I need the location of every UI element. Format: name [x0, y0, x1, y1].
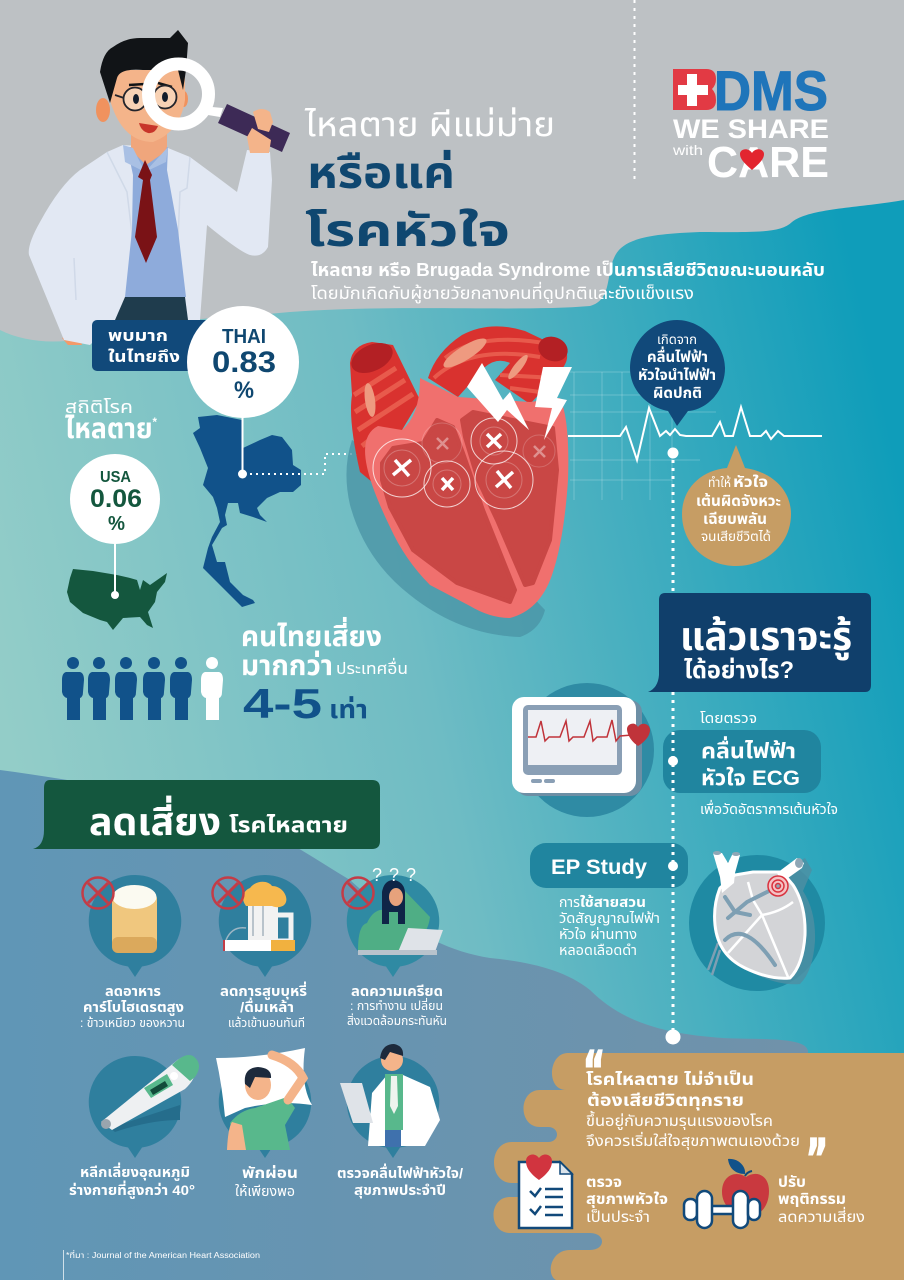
tip: annual ECG check	[337, 1044, 463, 1199]
text: by checking: โดยตรวจ	[700, 710, 757, 726]
no sign	[342, 878, 374, 908]
bubble: cause: เกิดจาก	[657, 332, 697, 347]
background: tan blob	[494, 1053, 904, 1280]
text: 4-5 times risk	[241, 616, 408, 727]
monitor body	[512, 697, 636, 793]
apple	[722, 1174, 769, 1215]
label box: found often in Thailand: พบมาก	[108, 328, 168, 345]
monitor screen	[528, 710, 617, 765]
aortic arch	[428, 326, 567, 404]
ECG label line 2: หัวใจ ECG	[701, 767, 800, 790]
text: adjust behaviour	[778, 1174, 865, 1226]
text: 4-5 times risk: คนไทยเสี่ยง	[241, 616, 382, 652]
person 1	[62, 657, 84, 720]
pin bubble USA 0.06%	[70, 454, 160, 544]
pillow	[216, 1048, 312, 1117]
logo wordmark DMS: DMS	[714, 59, 828, 122]
caption line 3: สิ่งแวดล้อมกระทันหัน	[347, 1013, 447, 1028]
caption: หลีกเลี่ยงอุณหภูมิ	[80, 1162, 190, 1182]
dotted divider by logo	[634, 0, 636, 180]
timeline end dot	[666, 1030, 680, 1044]
timeline ECG dot	[668, 756, 678, 766]
doctor coat	[29, 145, 272, 345]
bubble: effect: จนเสียชีวิตได้	[701, 529, 771, 544]
doctor eyes	[133, 92, 168, 104]
logo mark red B with cross	[673, 69, 716, 110]
magnifier handle	[218, 104, 290, 152]
doctor tie	[135, 160, 157, 263]
quote heading: โรคไหลตาย ไม่จำเป็น	[586, 1069, 754, 1089]
tip pin	[89, 875, 181, 977]
bubble: effect: ทำให้	[708, 475, 731, 490]
doctor collar	[123, 145, 168, 172]
doctor with tablet	[340, 1044, 440, 1147]
text: 4-5 times risk: ประเทศอื่น	[336, 657, 408, 678]
text: regular heart check: สุขภาพหัวใจ	[586, 1191, 668, 1208]
label box: found often in Thailand	[92, 320, 210, 371]
heading: reduce risk: โรคไหลตาย	[229, 814, 348, 837]
tip pin	[219, 1056, 311, 1158]
heart shadow	[724, 858, 815, 984]
statistic: USA	[67, 454, 167, 630]
person 5	[170, 657, 192, 720]
heart body	[365, 378, 568, 618]
stressed woman	[358, 880, 443, 955]
EP description: การ	[559, 894, 580, 910]
bubble: cause: หัวใจนำไฟฟ้า	[638, 367, 716, 384]
logo: BDMS We Share with Care	[672, 59, 829, 187]
text: regular heart check	[586, 1174, 668, 1226]
intro bold line: ไหลตาย หรือ Brugada Syndrome เป็นการเสียชีวิตขณะนอนหลับ	[311, 260, 825, 280]
rice container	[112, 885, 157, 953]
text: regular heart check: ตรวจ	[586, 1174, 622, 1191]
tip: reduce smoking and alcohol	[212, 875, 311, 1030]
no sign	[82, 878, 114, 908]
pin dot Thailand	[238, 470, 247, 478]
heading: reduce risk: ลดเสี่ยง	[89, 795, 221, 844]
target mark	[768, 876, 788, 896]
caption: ลดความเครียด	[351, 983, 443, 999]
label box: found often in Thailand: ในไทยถึง	[108, 349, 180, 366]
heart septum lines	[728, 882, 793, 977]
EP label: EP Study	[551, 856, 647, 879]
caption: ลดการสูบบุหรี่	[220, 981, 307, 1001]
monitor backdrop circle	[520, 683, 654, 817]
bubble: effect: หัวใจ	[733, 474, 768, 491]
doctor hand bottom	[62, 332, 82, 345]
pin bubble Thailand 0.83%: %	[234, 377, 254, 404]
EP description: วัดสัญญาณไฟฟ้า	[559, 910, 660, 926]
icon: apple and dumbbell	[684, 1159, 769, 1228]
EP box	[530, 843, 688, 888]
logo with: with	[672, 142, 703, 158]
icon: ECG monitor	[512, 683, 654, 817]
text: ECG	[663, 710, 838, 817]
caption: ลดอาหาร	[105, 983, 161, 999]
pulmonary stripes	[354, 368, 413, 446]
ECG box	[663, 730, 821, 793]
lower catheter lines	[708, 943, 720, 975]
text: adjust behaviour: ลดความเสี่ยง	[778, 1206, 865, 1226]
quote text: ขึ้นอยู่กับความรุนแรงของโรค	[586, 1110, 773, 1130]
doctor ears	[96, 91, 188, 122]
pin line USA	[114, 540, 116, 595]
EP description	[559, 894, 660, 958]
heart shadow	[346, 440, 545, 637]
heading: how do we know	[648, 593, 871, 692]
person 6 white	[201, 657, 223, 720]
bubble: cause	[630, 320, 725, 426]
logo slogan: WE SHARE	[673, 114, 829, 144]
icon: checklist	[519, 1154, 572, 1228]
lightning bolt 2	[535, 367, 572, 440]
EP description: ใช้สายสวน	[580, 894, 646, 910]
pulmonary artery	[350, 342, 420, 482]
background: blue-grey wave	[0, 770, 904, 1280]
backdrop circle	[689, 855, 825, 991]
aorta opening	[535, 333, 571, 365]
caption line 2: ร่างกายที่สูงกว่า 40°	[69, 1180, 195, 1200]
closing quote mark: ”	[806, 1129, 828, 1189]
quote block	[583, 1041, 828, 1189]
caption line 2: : การทำงาน เปลี่ยน	[350, 997, 443, 1013]
great vessels white	[713, 853, 804, 893]
affected areas with crosses	[373, 418, 555, 509]
heart body	[715, 872, 805, 978]
dumbbell	[684, 1191, 760, 1228]
vessel ends	[713, 851, 803, 868]
person 3	[115, 657, 137, 720]
doctor hair	[100, 30, 188, 103]
no sign	[212, 878, 244, 908]
apple stem	[745, 1171, 752, 1176]
aorta stripes	[434, 340, 555, 392]
tip pin	[347, 875, 439, 977]
bubble: cause: ผิดปกติ	[653, 385, 702, 402]
pin bubble Thailand 0.83%	[187, 306, 299, 418]
question marks: ? ? ?	[372, 865, 416, 885]
map: Thailand	[193, 415, 301, 607]
title line 2: หรือแค่	[307, 149, 455, 198]
bubble: effect: เต้นผิดจังหวะ	[696, 492, 781, 510]
text: 4-5 times risk: มากกว่า	[241, 650, 333, 681]
title line 3: โรคหัวใจ	[305, 207, 510, 256]
heading: stats	[65, 397, 157, 444]
tip pin	[219, 875, 311, 977]
doctor glasses	[115, 86, 176, 110]
chamber right	[462, 412, 557, 585]
source note: *ที่มา : Journal of the American Heart Association	[66, 1249, 260, 1260]
caption: ตรวจคลื่นไฟฟ้าหัวใจ/	[337, 1163, 463, 1181]
EP description: หลอดเลือดดำ	[559, 942, 637, 958]
thermometer shadow	[110, 1105, 180, 1132]
intro second line: โดยมักเกิดกับผู้ชายวัยกลางคนที่ดูปกติและยังแข็งแรง	[311, 281, 694, 305]
map: USA	[67, 569, 167, 630]
apple leaf	[728, 1159, 745, 1174]
statistic: Thailand	[92, 306, 301, 607]
logo CARE: CARE	[707, 138, 829, 187]
magnifier ring	[148, 64, 208, 124]
pin bubble Thailand 0.83%: 0.83	[212, 346, 276, 379]
caption line 3: : ข้าวเหนียว ของหวาน	[80, 1016, 185, 1030]
monitor ECG trace	[528, 720, 632, 741]
pin bubble Thailand 0.83%: THAI	[222, 326, 266, 348]
people pictogram	[62, 657, 223, 720]
bubble: cause: คลื่นไฟฟ้า	[647, 346, 708, 366]
doctor illustration	[29, 30, 290, 345]
bubble: effect: เฉียบพลัน	[703, 511, 767, 528]
text: 4-5 times risk: 4-5	[243, 680, 322, 727]
tip: reduce carbohydrates	[80, 875, 185, 1030]
chamber left	[382, 420, 515, 602]
magnifier neck	[208, 107, 223, 117]
pin line Thailand	[242, 410, 244, 474]
catheter lines	[725, 887, 777, 965]
heading: how do we know: ได้อย่างไร?	[684, 656, 794, 684]
beer mug	[223, 882, 295, 951]
intro text	[311, 260, 825, 305]
pin bubble USA 0.06%: USA	[100, 469, 131, 486]
doctor lapels	[74, 152, 190, 300]
tip: avoid high body temperature	[69, 1055, 199, 1200]
caption line 2: คาร์โบไฮเดรตสูง	[83, 999, 184, 1017]
caption line 2: ให้เพียงพอ	[235, 1183, 295, 1199]
ECG description: เพื่อวัดอัตราการเต้นหัวใจ	[700, 799, 838, 817]
pulmonary highlight	[363, 382, 377, 418]
title	[304, 106, 555, 256]
monitor buttons	[533, 779, 553, 783]
opening quote mark: “	[583, 1041, 605, 1101]
lightning bolt 1	[467, 363, 529, 430]
heading: how do we know: แล้วเราจะรู้	[680, 614, 852, 661]
doctor mouth	[139, 123, 158, 133]
dotted link map to heart	[250, 454, 376, 474]
heading: stats: *	[153, 415, 157, 429]
tip pin	[89, 1056, 181, 1158]
logo heart	[740, 149, 764, 170]
heading: reduce risk	[33, 780, 380, 849]
heading: stats: ไหลตาย	[65, 413, 157, 444]
caption line 2: สุขภาพประจำปี	[354, 1182, 446, 1199]
ECG label: คลื่นไฟฟ้า	[701, 736, 796, 763]
thermometer	[101, 1055, 199, 1130]
doctor face	[110, 70, 185, 142]
quote text line 2: จึงควรเริ่มใส่ใจสุขภาพตนเองด้วย	[586, 1131, 800, 1150]
ECG grid	[570, 372, 716, 500]
tip: reduce stress	[342, 865, 447, 1028]
monitor heart	[627, 724, 650, 746]
icon: catheter heart	[689, 851, 825, 991]
tip pin	[347, 1056, 439, 1158]
heading: stats: สถิติโรค	[65, 397, 133, 417]
caption line 3: แล้วเข้านอนทันที	[228, 1016, 305, 1030]
doctor brows	[129, 83, 172, 87]
text: EP Study	[530, 843, 688, 958]
doctor trousers	[115, 297, 188, 320]
aorta highlights	[440, 334, 530, 381]
text: adjust behaviour: ปรับ	[778, 1174, 806, 1191]
timeline EP dot	[668, 861, 678, 871]
doctor raised hand	[247, 109, 273, 153]
doctor shirt	[125, 147, 186, 297]
pin bubble USA 0.06%: 0.06	[90, 485, 142, 513]
caption line 2: /ดื่มเหล้า	[240, 997, 294, 1015]
monitor screen frame	[523, 705, 622, 775]
pin dot USA	[111, 591, 119, 599]
dotted timeline	[672, 460, 674, 1030]
sleeping man	[227, 1055, 303, 1150]
timeline dot	[668, 448, 678, 458]
monitor shadow	[516, 700, 642, 796]
quote heading line 2: ต้องเสียชีวิตทุกราย	[587, 1091, 744, 1111]
text: 4-5 times risk: เท่า	[329, 694, 368, 724]
text: adjust behaviour: พฤติกรรม	[778, 1191, 846, 1208]
bubble: effect	[682, 445, 791, 566]
pulmonary opening	[347, 337, 397, 379]
doctor neck	[131, 125, 167, 165]
text: regular heart check: เป็นประจำ	[586, 1209, 650, 1226]
caption: พักผ่อน	[242, 1164, 298, 1182]
pin bubble USA 0.06%: %	[108, 513, 125, 535]
title line 1: ไหลตาย ผีแม่ม่าย	[304, 106, 555, 144]
person 4	[143, 657, 165, 720]
tip: get enough rest	[216, 1048, 312, 1199]
person 2	[88, 657, 110, 720]
ECG line	[568, 407, 822, 460]
heart illustration	[346, 326, 716, 637]
EP description: หัวใจ ผ่านทาง	[559, 926, 637, 942]
